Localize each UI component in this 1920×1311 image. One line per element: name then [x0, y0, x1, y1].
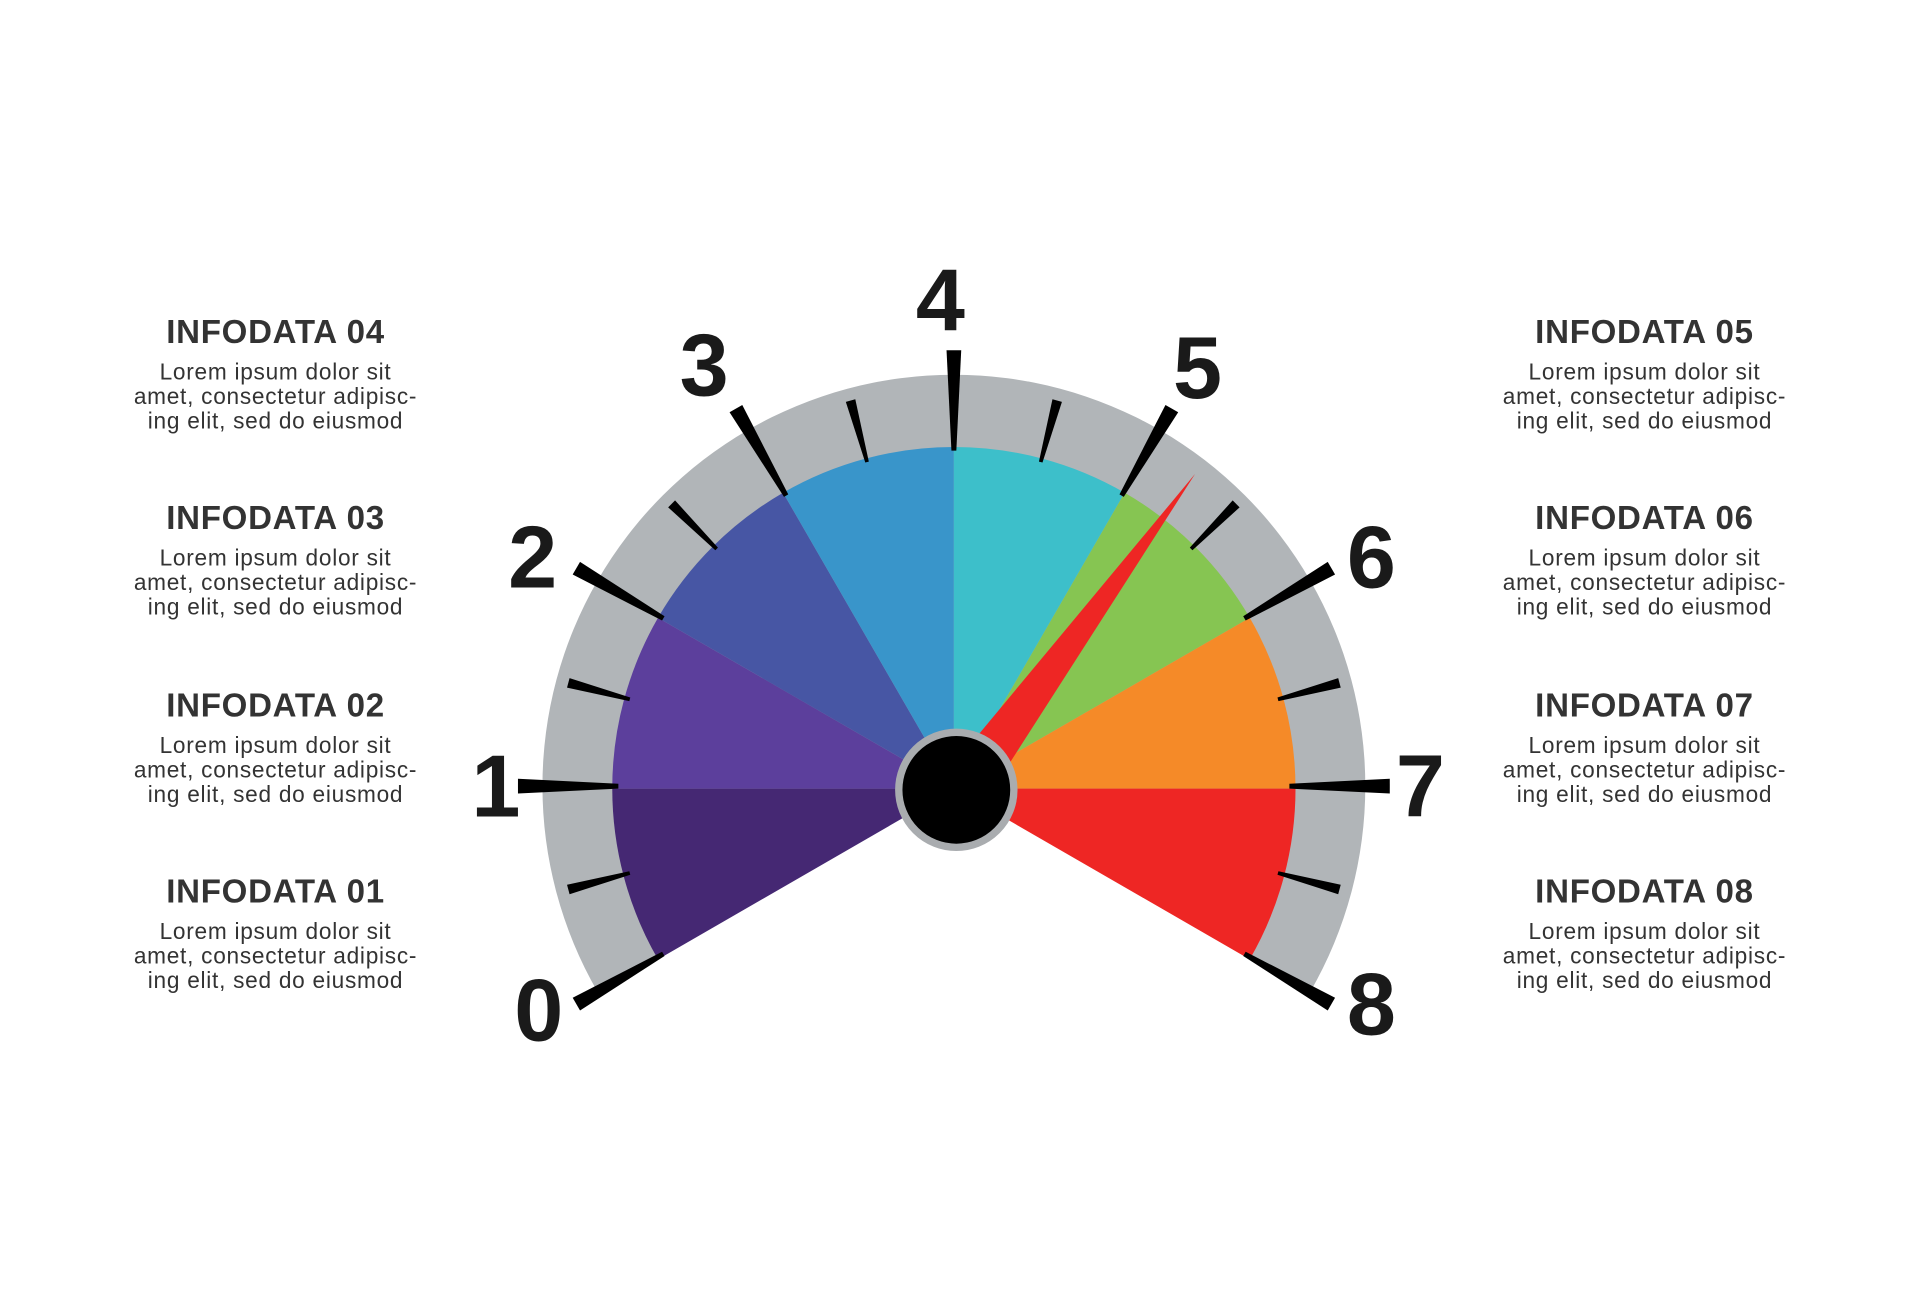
infodata 05: Lorem ipsum dolor sit [1529, 359, 1760, 385]
infodata 08 [1503, 873, 1786, 993]
infodata 08: amet, consectetur adipisc- [1503, 943, 1786, 969]
infodata 08: ing elit, sed do eiusmod [1517, 967, 1772, 993]
scale numbers: 8 [1347, 955, 1396, 1054]
infodata 02: INFODATA 02 [166, 687, 385, 724]
colored segments [573, 407, 1335, 959]
right labels [1503, 314, 1786, 993]
infodata 03: amet, consectetur adipisc- [134, 569, 417, 595]
infodata 06: Lorem ipsum dolor sit [1529, 545, 1760, 571]
infodata 07: ing elit, sed do eiusmod [1517, 781, 1772, 807]
infodata 06: amet, consectetur adipisc- [1503, 569, 1786, 595]
infodata 02: amet, consectetur adipisc- [134, 757, 417, 783]
scale numbers: 6 [1347, 508, 1396, 607]
infodata 05: amet, consectetur adipisc- [1503, 383, 1786, 409]
scale numbers [471, 251, 1445, 1060]
scale numbers: 1 [471, 737, 520, 836]
center hub [899, 732, 1014, 847]
infodata 07 [1503, 687, 1786, 807]
infodata 01: amet, consectetur adipisc- [134, 943, 417, 969]
infodata 02: ing elit, sed do eiusmod [148, 781, 403, 807]
scale numbers: 4 [916, 251, 965, 350]
infodata 08: INFODATA 08 [1535, 873, 1754, 910]
infodata 04: ing elit, sed do eiusmod [148, 408, 403, 434]
scale numbers: 0 [514, 961, 563, 1060]
major ticks [518, 350, 1390, 1010]
needle [972, 474, 1195, 764]
minor ticks [567, 399, 1341, 894]
gauge background band [542, 375, 1365, 992]
infodata 07: amet, consectetur adipisc- [1503, 757, 1786, 783]
infodata 01: INFODATA 01 [166, 873, 385, 910]
infodata 01 [134, 873, 417, 993]
infodata 04: INFODATA 04 [166, 314, 385, 351]
infodata 03: ing elit, sed do eiusmod [148, 594, 403, 620]
infodata 08: Lorem ipsum dolor sit [1529, 918, 1760, 944]
infodata 03 [134, 500, 417, 620]
infodata 01: ing elit, sed do eiusmod [148, 967, 403, 993]
infodata 07: INFODATA 07 [1535, 687, 1754, 724]
infodata 05 [1503, 314, 1786, 434]
scale numbers: 7 [1396, 737, 1445, 836]
infodata 04 [134, 314, 417, 434]
infodata 05: ing elit, sed do eiusmod [1517, 408, 1772, 434]
infodata 06: INFODATA 06 [1535, 500, 1754, 537]
gauge [471, 251, 1445, 1060]
infodata 04: amet, consectetur adipisc- [134, 383, 417, 409]
left labels [134, 314, 417, 993]
scale numbers: 5 [1173, 318, 1222, 417]
infodata 01: Lorem ipsum dolor sit [160, 918, 391, 944]
infodata 04: Lorem ipsum dolor sit [160, 359, 391, 385]
infodata 02 [134, 687, 417, 807]
scale numbers: 2 [508, 508, 557, 607]
infodata 02: Lorem ipsum dolor sit [160, 732, 391, 758]
infodata 07: Lorem ipsum dolor sit [1529, 732, 1760, 758]
infodata 06: ing elit, sed do eiusmod [1517, 594, 1772, 620]
infodata 03: Lorem ipsum dolor sit [160, 545, 391, 571]
infodata 05: INFODATA 05 [1535, 314, 1754, 351]
infodata 03: INFODATA 03 [166, 500, 385, 537]
scale numbers: 3 [680, 315, 729, 414]
infodata 06 [1503, 500, 1786, 620]
